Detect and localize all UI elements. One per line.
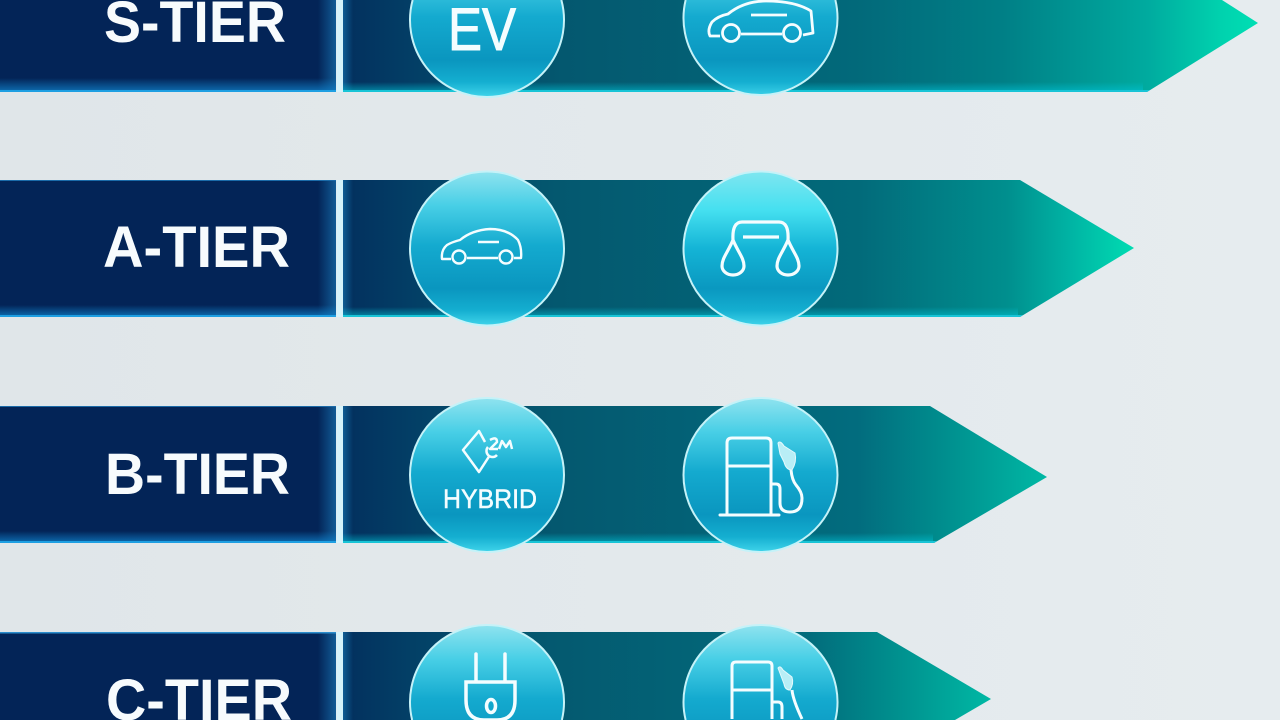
icon: fuel pump xyxy=(684,398,838,552)
icon: hybrid: HYBRID xyxy=(443,484,537,514)
icon: car xyxy=(684,0,838,95)
icon: plug xyxy=(410,625,564,720)
row: A-tier xyxy=(0,172,1134,326)
A-tier label block xyxy=(0,180,336,317)
row: C-tier xyxy=(0,625,991,720)
B-tier label block xyxy=(0,406,336,543)
row: S-tier xyxy=(0,0,1258,97)
icon: fuel pump small xyxy=(684,625,838,720)
row: B-tier xyxy=(0,398,1047,552)
C-tier label block xyxy=(0,632,336,720)
icon: EV xyxy=(410,0,564,97)
S-tier label block xyxy=(0,0,336,92)
A-tier label block: A-TIER xyxy=(103,215,290,280)
B-tier arrow xyxy=(343,406,1047,543)
vertical glowing dividers xyxy=(336,0,343,720)
icon: drops xyxy=(684,172,838,326)
icon: car outline xyxy=(410,172,564,326)
icon: hybrid xyxy=(410,398,564,552)
S-tier arrow xyxy=(343,0,1258,92)
A-tier arrow xyxy=(343,180,1134,317)
C-tier arrow xyxy=(343,632,991,720)
B-tier label block: B-TIER xyxy=(105,442,290,507)
